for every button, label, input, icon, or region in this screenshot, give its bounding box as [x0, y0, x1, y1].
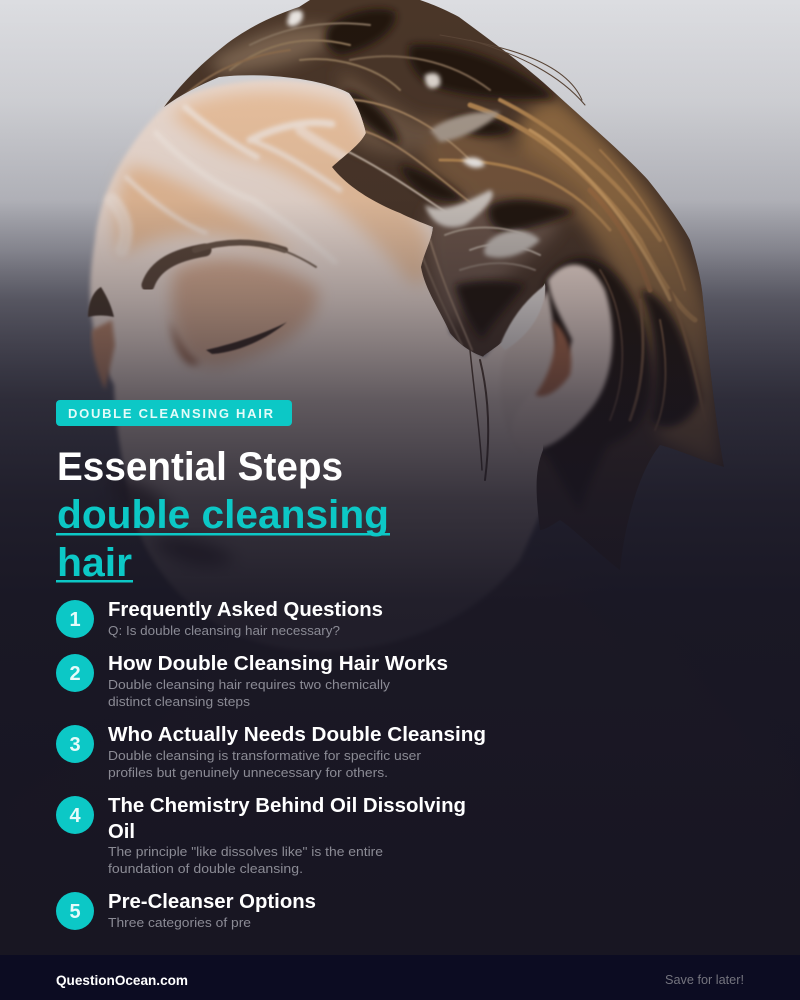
footer bar — [0, 955, 800, 1000]
step 4: The principle "like dissolves like" is the entire — [108, 844, 383, 859]
lower face shadows — [105, 470, 170, 521]
step 4: 4 — [69, 805, 81, 827]
loose strands over face and sky — [440, 35, 585, 480]
step 3: Who Actually Needs Double Cleansing — [108, 724, 486, 746]
title — [56, 445, 390, 585]
step 3: Double cleansing is transformative for specific user — [108, 748, 422, 763]
ear — [511, 265, 613, 451]
step 2: 2 — [69, 663, 81, 685]
step 3 — [56, 724, 486, 780]
hair foam patches — [287, 10, 540, 258]
step 4: foundation of double cleansing. — [108, 861, 303, 876]
step 4 — [56, 795, 466, 876]
main hair mass — [164, 0, 724, 522]
hair tone patches — [210, 26, 720, 470]
forehead foam streaks — [112, 107, 358, 262]
step 2 — [56, 653, 448, 709]
step 5: Three categories of pre — [108, 915, 251, 930]
step 4: Oil — [108, 821, 135, 843]
step 5: 5 — [69, 901, 81, 923]
step 1 — [56, 599, 383, 638]
badge: DOUBLE CLEANSING HAIR — [68, 406, 274, 421]
eye socket peach tone — [172, 259, 318, 366]
footer bar: QuestionOcean.com — [56, 972, 188, 988]
footer bar: Save for later! — [665, 972, 744, 987]
skin between hair and ear — [500, 290, 565, 452]
photo background: woman washing hair — [0, 0, 800, 650]
badge — [56, 400, 292, 426]
step 3: 3 — [69, 734, 81, 756]
forehead peach tone — [170, 91, 430, 284]
step 2: distinct cleansing steps — [108, 694, 251, 709]
step 1: 1 — [69, 609, 81, 631]
foam strip by ear — [500, 285, 545, 350]
face skin — [90, 80, 615, 651]
title: hair — [57, 541, 132, 585]
title: Essential Steps — [57, 445, 343, 489]
step 1: Frequently Asked Questions — [108, 599, 383, 621]
step 5: Pre-Cleanser Options — [108, 891, 316, 913]
dark hair clumps — [326, 9, 700, 510]
step 5 — [56, 891, 316, 930]
step 4: The Chemistry Behind Oil Dissolving — [108, 795, 466, 817]
hair base colour — [164, 0, 724, 522]
eyebrow left — [88, 287, 114, 317]
closed eye lashes — [206, 322, 287, 354]
title: double cleansing — [57, 493, 389, 537]
step 3: profiles but genuinely unnecessary for others. — [108, 765, 388, 780]
eyebrow right — [148, 242, 316, 285]
step 1: Q: Is double cleansing hair necessary? — [108, 623, 340, 638]
shoulders and neck — [0, 560, 800, 1000]
hair strands — [180, 23, 705, 430]
step 2: How Double Cleansing Hair Works — [108, 653, 448, 675]
step 2: Double cleansing hair requires two chemically — [108, 677, 391, 692]
